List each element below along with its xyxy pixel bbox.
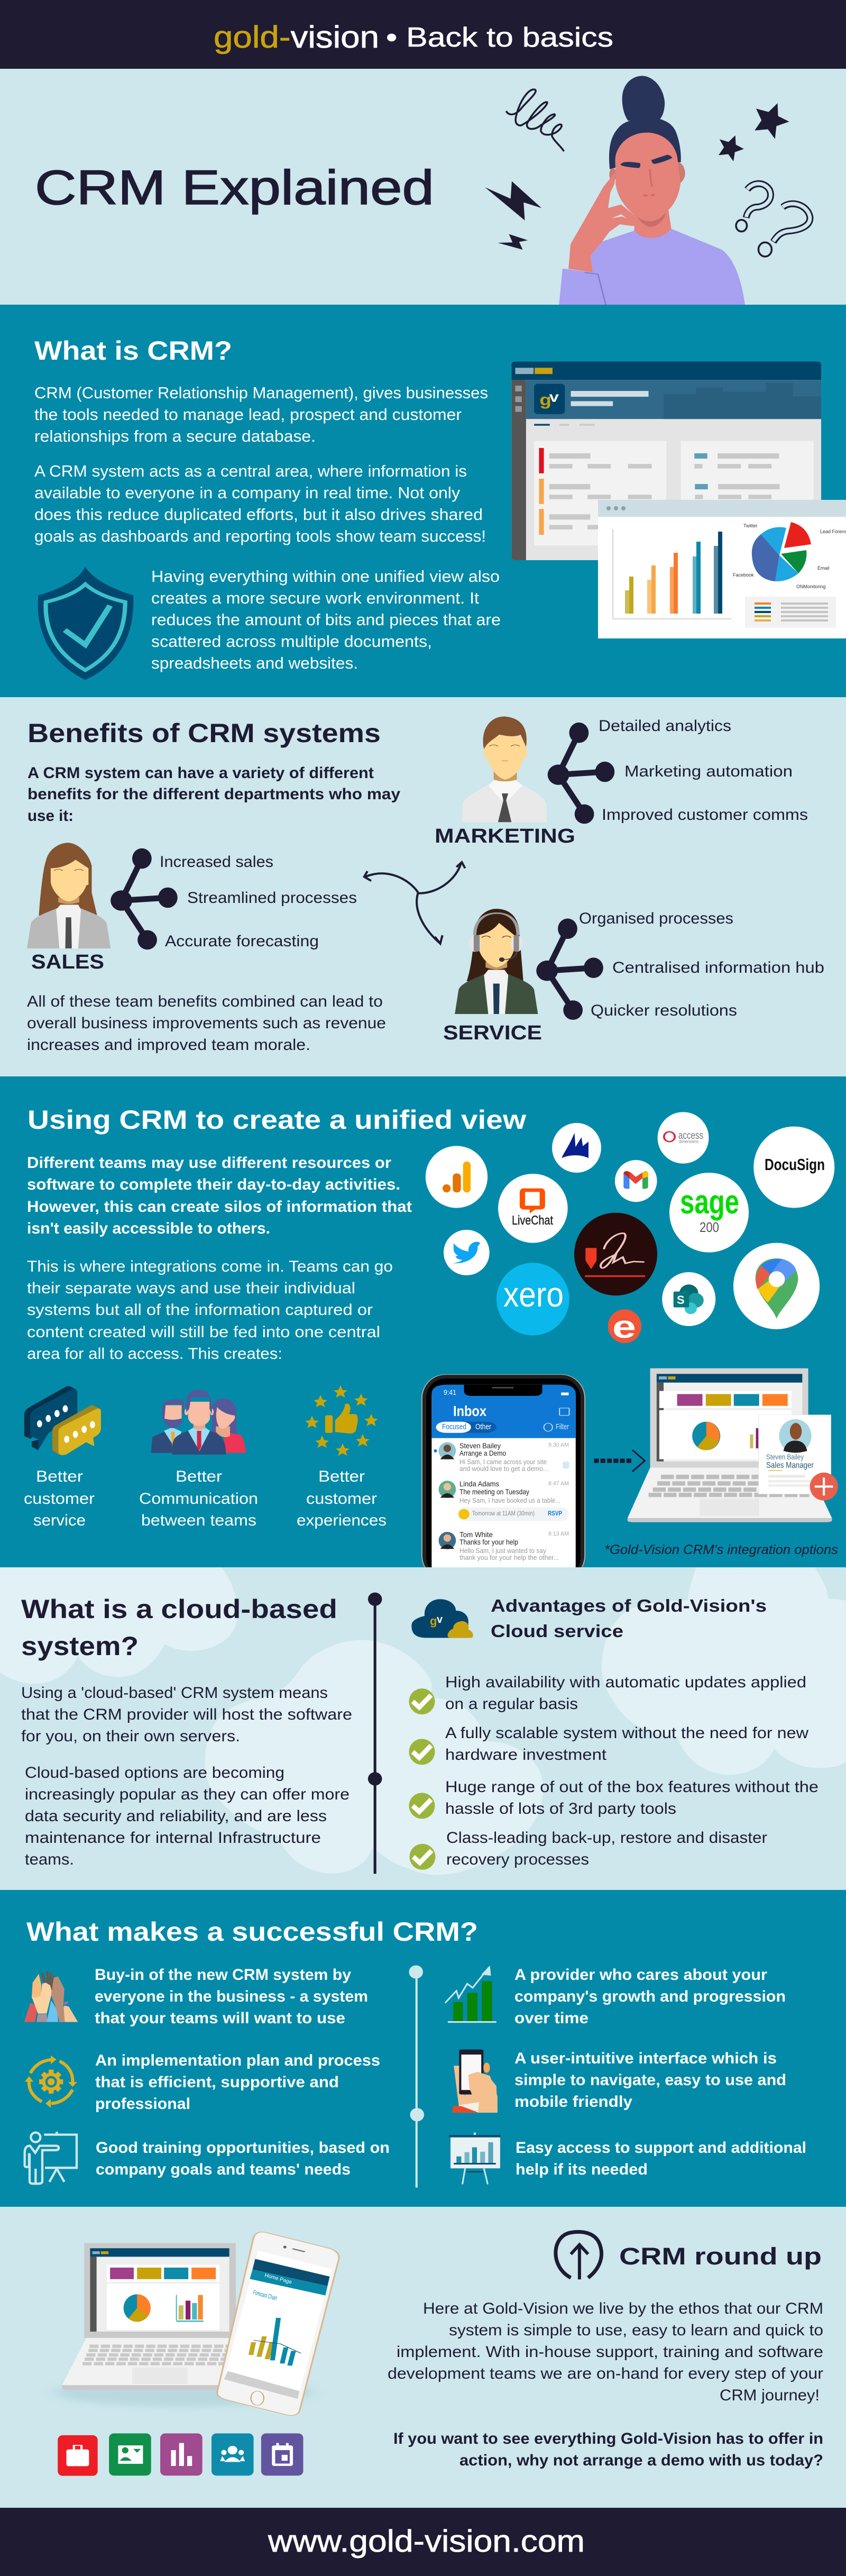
text block: definition: goals as dashboards and reporting tools show team success! <box>34 527 486 545</box>
laptop mockup with contact card: Steven Bailey <box>766 1453 804 1461</box>
illustration: thinking woman <box>485 76 810 305</box>
logo text: access <box>678 1130 703 1141</box>
list: service benefits: Quicker resolutions <box>591 1002 737 1019</box>
text block: silos: However, this can create silos of information that <box>27 1198 412 1216</box>
list: advantages: on a regular basis <box>445 1695 578 1713</box>
heading: Benefits of CRM systems <box>27 718 381 748</box>
pie chart: Email <box>817 565 830 571</box>
list: advantages: Huge range of out of the box features without the <box>445 1778 819 1796</box>
logo text: 200 <box>700 1219 719 1235</box>
text block: integrations: their separate ways and use their individual <box>27 1280 355 1297</box>
icon: bar chart tile <box>160 2433 203 2475</box>
captions: three benefits: between teams <box>141 1512 256 1529</box>
text block: round up: system is simple to use, easy to learn and quick to <box>449 2322 823 2339</box>
dashboard screenshot: v <box>549 389 559 405</box>
website link text: www.gold-vision.com <box>268 2524 585 2559</box>
dashboard screenshot <box>511 362 821 560</box>
icon: lightning bolts <box>485 181 541 250</box>
pie chart: Twitter <box>743 523 758 528</box>
text block: right column: A provider who cares about your <box>514 1966 767 1984</box>
phone mockup: inbox: RSVP <box>548 1510 562 1517</box>
note: integration options: *Gold-Vision CRM's integration options <box>604 1542 838 1557</box>
icon: thumbs up stars <box>305 1385 378 1456</box>
panel: unified view <box>0 1076 846 1579</box>
phone mockup: inbox: 9:30 AM <box>548 1442 569 1448</box>
divider with nodes <box>409 1965 424 2188</box>
footer bar <box>0 2508 846 2576</box>
phone mockup: inbox: The meeting on Tuesday <box>459 1487 529 1496</box>
text block: intro: benefits for the different departments who may <box>27 785 400 803</box>
phone mockup: inbox: Thanks for your help <box>459 1538 518 1546</box>
list: advantages: recovery processes <box>446 1851 589 1868</box>
phone mockup: inbox: and would love to get a demo... <box>459 1465 548 1473</box>
list: advantages: Class-leading back-up, restore and disaster <box>446 1829 767 1847</box>
icon: access <box>664 1132 675 1141</box>
logo text: DocuSign <box>765 1155 825 1174</box>
list: sales benefits: Accurate forecasting <box>165 933 319 950</box>
text block: intro: use it: <box>27 807 73 825</box>
list: service benefits: Organised processes <box>579 910 733 927</box>
panel: benefits of CRM systems <box>0 697 846 1076</box>
icon: sales person <box>27 843 111 948</box>
text block: integrations: area for all to access. This creates: <box>27 1345 282 1363</box>
captions: three benefits: experiences <box>297 1512 387 1529</box>
list: advantages: hassle of lots of 3rd party tools <box>445 1800 676 1817</box>
phone mockup: inbox: Hello Sam, I just wanted to say <box>459 1547 546 1555</box>
logo text: LiveChat <box>512 1213 553 1228</box>
icon: team tile <box>212 2433 254 2475</box>
laptop mockup with contact card <box>628 1368 838 1522</box>
logo text: dimensions <box>679 1139 698 1144</box>
phone mockup: inbox: Tomorrow at 11AM (30min) <box>472 1510 535 1517</box>
hero panel <box>0 69 846 305</box>
icon: presenter <box>25 2132 77 2184</box>
text block: summary: All of these team benefits combined can lead to <box>27 993 383 1010</box>
text block: definition: the tools needed to manage lead, prospect and customer <box>34 405 462 424</box>
logo text: xero <box>503 1275 564 1314</box>
text block: right column: simple to navigate, easy to use and <box>514 2071 786 2089</box>
title: CRM Explained <box>35 161 434 215</box>
icon: joined hands <box>24 1971 78 2022</box>
text block: round up: implement. With in-house support, training and software <box>397 2343 823 2361</box>
text block: right column: company's growth and progression <box>514 1988 786 2005</box>
label: sales: SALES <box>31 951 104 973</box>
text block: silos <box>27 1154 412 1237</box>
connector: sales benefits <box>111 848 178 949</box>
chart legend <box>745 597 836 628</box>
icon: security shield <box>38 567 133 680</box>
icon: twitter <box>453 1242 480 1263</box>
phone mockup: inbox: Arrange a Demo <box>459 1449 506 1457</box>
captions: three benefits: customer <box>24 1490 95 1508</box>
icon: check marks <box>409 1688 435 1870</box>
list: marketing benefits: Detailed analytics <box>599 717 731 735</box>
logo text: S <box>677 1293 685 1307</box>
laptop mockup with contact card: Sales Manager <box>766 1461 814 1470</box>
icon: round up arrow <box>556 2232 602 2279</box>
brand logo text: gold- vision <box>214 20 379 54</box>
text block: left column: Good training opportunities, based on <box>96 2139 390 2157</box>
heading: What is CRM? <box>34 336 232 366</box>
phone mockup: inbox: Inbox <box>453 1403 486 1419</box>
heading: advantages <box>491 1596 767 1641</box>
icon: dynamics <box>562 1133 588 1158</box>
phone mockup: inbox: Hi Sam, I came across your site <box>459 1458 547 1466</box>
phone mockup: inbox: Steven Bailey <box>459 1441 501 1450</box>
text block: security: spreadsheets and websites. <box>151 654 358 672</box>
phone mockup: inbox: 8:47 AM <box>548 1481 569 1487</box>
text block: security: Having everything within one unified view also <box>151 567 500 586</box>
list: marketing benefits: Improved customer comms <box>602 806 808 824</box>
text block: call to action <box>393 2430 823 2469</box>
arrows between teams <box>364 862 465 944</box>
phone mockup: inbox: Linda Adams <box>459 1479 499 1488</box>
text block: left column: An implementation plan and process <box>95 2052 380 2069</box>
laptop and phone mockup <box>54 2232 339 2415</box>
heading <box>21 1594 337 1661</box>
icon: calendar tile <box>261 2433 303 2475</box>
text block: intro <box>27 764 400 825</box>
list: advantages <box>409 1674 819 1870</box>
text block: integrations <box>27 1258 393 1363</box>
text block: integrations: This is where integrations come in. Teams can go <box>27 1258 393 1275</box>
icon: question marks <box>736 184 810 257</box>
phone mockup: inbox <box>422 1375 585 1579</box>
header tagline: • Back to basics <box>386 22 613 53</box>
icon: sharepoint <box>674 1284 704 1314</box>
logo text: sage <box>680 1183 739 1221</box>
panel: CRM round up <box>0 2207 846 2508</box>
text block: security: reduces the amount of bits and pieces that are <box>151 610 501 629</box>
text block: integrations: content created will still be fed into one central <box>27 1323 380 1341</box>
text block: left column <box>95 1966 390 2178</box>
text block: right column <box>514 1966 806 2178</box>
list: marketing benefits <box>599 717 808 824</box>
text block: silos: Different teams may use different resources or <box>27 1154 391 1172</box>
text block: definition: relationships from a secure database. <box>34 427 316 445</box>
laptop and phone mockup: Forecast Chart <box>252 2288 278 2302</box>
text block: cloud definition: that the CRM provider will host the software <box>21 1706 352 1723</box>
captions: three benefits: service <box>33 1512 86 1529</box>
text block: silos: software to complete their day-to-day activities. <box>27 1176 400 1193</box>
text block: left column: that is efficient, supportive and <box>95 2073 339 2091</box>
captions: three benefits: Better <box>176 1468 222 1485</box>
icon: livechat <box>520 1189 545 1213</box>
icon: gold-vision cloud: g <box>430 1614 437 1628</box>
text block: round up: Here at Gold-Vision we live by the ethos that our CRM <box>423 2300 823 2317</box>
heading: Using CRM to create a unified view <box>27 1105 526 1135</box>
text block: call to action: If you want to see everything Gold-Vision has to offer in <box>393 2430 823 2447</box>
text block: cloud definition: data security and reliability, and are less <box>25 1807 327 1825</box>
phone mockup: inbox: thank you for your help the other... <box>459 1554 559 1561</box>
text block: left column: Buy-in of the new CRM system by <box>95 1966 351 1984</box>
text block: security: creates a more secure work environment. It <box>151 589 479 607</box>
text block: definition: available to everyone in a company in real time. Not only <box>34 483 461 502</box>
icon: analytics <box>443 1162 471 1192</box>
dashboard screenshot: g <box>539 391 551 409</box>
app icons <box>58 2433 303 2476</box>
heading: advantages: Advantages of Gold-Vision's <box>491 1596 767 1615</box>
panel: what makes a successful CRM <box>0 1890 846 2207</box>
text block: call to action: action, why not arrange a demo with us today? <box>459 2452 823 2469</box>
integration logos <box>426 1112 834 1345</box>
text block: right column: Easy access to support and additional <box>516 2139 806 2157</box>
logo text <box>503 1130 825 1345</box>
list: advantages: A fully scalable system without the need for new <box>445 1724 808 1742</box>
text block: left column: that your teams will want to use <box>95 2009 345 2027</box>
icon: implementation gear cycle <box>25 2056 77 2108</box>
captions: three benefits <box>24 1468 387 1529</box>
phone mockup: inbox: Other <box>475 1422 491 1431</box>
phone mockup: inbox: Filter <box>556 1422 569 1431</box>
icon: briefcase tile <box>58 2435 98 2476</box>
text block: security <box>151 567 501 672</box>
heading: What is a cloud-based <box>21 1594 337 1624</box>
logo text: e <box>612 1309 636 1345</box>
icon: team group <box>151 1390 246 1455</box>
pie chart: Facebook <box>733 572 754 578</box>
list: service benefits: Centralised information hub <box>612 959 824 976</box>
text block: summary <box>27 993 386 1054</box>
text block: left column: company goals and teams' needs <box>96 2161 351 2178</box>
list: marketing benefits: Marketing automation <box>624 763 793 780</box>
icon: gmail <box>623 1171 648 1189</box>
list: sales benefits <box>160 853 357 950</box>
list: advantages: High availability with automatic updates applied <box>445 1674 806 1691</box>
text block: cloud definition: Using a 'cloud-based' CRM system means <box>21 1684 328 1702</box>
icon: squiggle <box>506 89 564 151</box>
phone mockup: inbox: 9:41 <box>444 1388 456 1396</box>
background clouds <box>0 1567 846 1875</box>
text block: intro: A CRM system can have a variety of different <box>27 764 374 782</box>
text block: cloud definition: Cloud-based options are becoming <box>25 1764 284 1782</box>
heading: advantages: Cloud service <box>491 1621 623 1641</box>
phone mockup: inbox: Hey Sam, I have booked us a table... <box>459 1496 560 1504</box>
text block: cloud definition: teams. <box>25 1851 74 1868</box>
text block: security: scattered across multiple documents, <box>151 632 432 651</box>
list: sales benefits: Streamlined processes <box>187 889 357 907</box>
text block: left column: everyone in the business - a system <box>95 1988 368 2005</box>
captions: three benefits: customer <box>306 1490 377 1508</box>
text block: round up: development teams we are on-hand for every step of your <box>388 2365 823 2382</box>
report card with charts <box>598 500 846 638</box>
heading: CRM round up <box>619 2243 822 2270</box>
icon: adobe sign <box>574 1213 657 1295</box>
icon: growth chart <box>445 1966 496 2023</box>
icon: maps pin <box>756 1258 798 1319</box>
header bar <box>0 0 846 69</box>
pie chart <box>733 522 846 589</box>
laptop and phone mockup: Home Page <box>264 2272 293 2286</box>
icon: stars <box>719 103 789 161</box>
icon: gold-vision cloud: v <box>437 1614 443 1625</box>
text block: definition: does this reduce duplicated efforts, but it also drives shared <box>34 505 483 524</box>
text block: right column: A user-intuitive interface which is <box>514 2050 777 2067</box>
divider with nodes <box>368 1593 382 1874</box>
list: advantages: hardware investment <box>445 1746 607 1764</box>
icon: service person <box>455 909 538 1014</box>
icon: xero <box>496 1263 569 1336</box>
label: service: SERVICE <box>443 1022 542 1044</box>
text block: summary: increases and improved team morale. <box>27 1036 310 1054</box>
icon: marketing person <box>462 716 547 822</box>
phone mockup: inbox: Tom White <box>459 1530 493 1539</box>
text block: definition: A CRM system acts as a central area, where information is <box>34 462 467 480</box>
text block: definition <box>34 383 488 545</box>
heading: system? <box>21 1631 139 1661</box>
text block: right column: mobile friendly <box>514 2093 632 2111</box>
icon: hand holding phone <box>452 2050 498 2113</box>
icon: contact card tile <box>109 2433 151 2475</box>
phone mockup: inbox: 8:13 AM <box>548 1531 569 1537</box>
icon: eventbrite <box>608 1309 641 1343</box>
text block: cloud definition: maintenance for internal Infrastructure <box>25 1829 321 1847</box>
text block: left column: professional <box>95 2095 190 2113</box>
captions: three benefits: Communication <box>139 1490 258 1508</box>
text block: cloud definition: for you, on their own servers. <box>21 1728 240 1745</box>
label: marketing: MARKETING <box>435 825 575 847</box>
captions: three benefits: Better <box>36 1468 83 1485</box>
text block: definition: CRM (Customer Relationship Management), gives businesses <box>34 383 488 402</box>
list: sales benefits: Increased sales <box>160 853 273 871</box>
text block: silos: isn't easily accessible to others. <box>27 1220 270 1237</box>
bar chart <box>613 529 731 619</box>
icon: presentation board <box>449 2133 501 2185</box>
heading: What makes a successful CRM? <box>26 1917 478 1947</box>
pie chart: ONMonitoring <box>796 584 826 589</box>
text block: cloud definition <box>21 1684 352 1868</box>
panel: cloud-based system <box>0 1567 846 1890</box>
connector: marketing benefits <box>548 723 614 824</box>
icon: chat bubbles <box>24 1386 101 1455</box>
text block: right column: help if its needed <box>516 2161 648 2178</box>
captions: three benefits: Better <box>318 1468 365 1485</box>
list: service benefits <box>579 910 824 1019</box>
connector: service benefits <box>536 918 603 1020</box>
text block: round up <box>388 2300 823 2404</box>
icon: gold-vision cloud <box>411 1599 473 1638</box>
arrow: phone to laptop <box>594 1450 645 1472</box>
text block: summary: overall business improvements such as revenue <box>27 1015 386 1032</box>
text block: integrations: systems but all of the information captured or <box>27 1301 373 1319</box>
text block: right column: over time <box>514 2009 588 2027</box>
text block: cloud definition: increasingly popular as they can offer more <box>25 1786 350 1803</box>
panel: what is CRM <box>0 305 846 697</box>
text block: round up: CRM journey! <box>720 2387 820 2404</box>
phone mockup: inbox: Focused <box>442 1422 466 1431</box>
